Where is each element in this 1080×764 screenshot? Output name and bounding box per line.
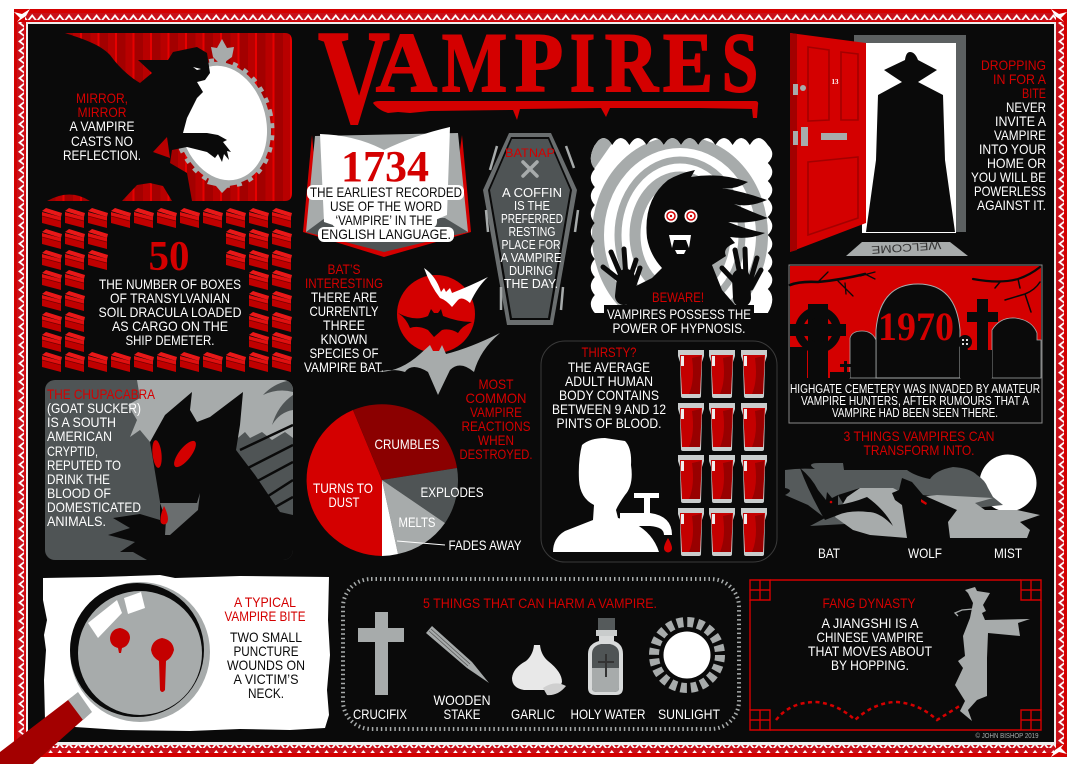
- bats text: KNOWN: [320, 331, 368, 347]
- pie chart: [307, 404, 458, 556]
- book text: ‘VAMPIRE’ IN THE: [336, 212, 432, 228]
- door heading: DROPPING: [981, 57, 1046, 73]
- label backing: [307, 185, 464, 242]
- thirsty text: BETWEEN 9 AND 12: [552, 401, 666, 417]
- pie labels: TURNS TO: [313, 480, 373, 496]
- icon: hypnotic figure: [625, 170, 768, 320]
- icon: magnifying glass: [70, 582, 210, 722]
- pie leader line: [397, 541, 445, 545]
- icon: graveyard ground: [790, 345, 992, 378]
- panel: vampire bite: [0, 575, 330, 764]
- bats text: VAMPIRE BAT.: [304, 359, 384, 375]
- icon: wolf eye: [921, 499, 927, 505]
- number 50: 50: [148, 234, 190, 280]
- cape highlight: [153, 137, 170, 158]
- harms labels: SUNLIGHT: [658, 706, 720, 722]
- boxes text: OF TRANSYLVANIAN: [110, 290, 230, 306]
- door edge: [790, 33, 797, 252]
- bats text: CURRENTLY: [310, 303, 379, 319]
- door text: NEVER: [1006, 99, 1046, 115]
- panel: highgate 1970: [789, 265, 1042, 423]
- hypnosis text: POWER OF HYPNOSIS.: [612, 320, 746, 336]
- boxes text: SHIP DEMETER.: [126, 332, 214, 348]
- transform labels: BAT: [818, 545, 840, 561]
- hypnosis text: VAMPIRES POSSESS THE: [607, 306, 751, 322]
- year 1970: 1970: [878, 304, 954, 349]
- icon: magnifier collar: [68, 692, 92, 720]
- bats text: THREE: [323, 317, 365, 333]
- chupacabra heading: THE CHUPACABRA: [47, 386, 156, 402]
- thirsty heading: THIRSTY?: [582, 344, 637, 360]
- pie heading: REACTIONS: [462, 418, 530, 434]
- harms labels: HOLY WATER: [570, 706, 646, 722]
- icon: crossbones: [523, 162, 537, 176]
- bite heading: A TYPICAL: [234, 594, 296, 610]
- bats text: THERE ARE: [311, 289, 377, 305]
- panel: bats: [304, 261, 500, 395]
- hypnosis heading: BEWARE!: [652, 289, 704, 305]
- door text: POWERLESS: [974, 183, 1046, 199]
- page sides: [306, 133, 468, 250]
- icon: small ball stone: [958, 335, 972, 349]
- door text: INVITE A: [995, 113, 1047, 129]
- pie heading: WHEN: [478, 432, 514, 448]
- mirror text: A VAMPIRE: [70, 118, 134, 134]
- icon: vampire in doorway: [866, 52, 955, 232]
- boxes text: AS CARGO ON THE: [112, 318, 228, 334]
- bite text: PUNCTURE: [234, 643, 298, 659]
- icon: fangs: [669, 235, 691, 254]
- icon: small headstone: [850, 331, 876, 378]
- bat eye: [830, 501, 832, 503]
- door text: VAMPIRE: [994, 127, 1046, 143]
- bite text: TWO SMALL: [230, 629, 302, 645]
- door heading: BITE: [1022, 85, 1046, 101]
- icon: jiangshi: [955, 587, 1030, 721]
- bats heading: BAT’S: [328, 261, 360, 277]
- bite text: A VICTIM’S: [234, 671, 298, 687]
- icon: vampire silhouette: [28, 33, 231, 201]
- transform labels: WOLF: [908, 545, 942, 561]
- chupacabra text: (GOAT SUCKER): [47, 400, 141, 416]
- coffin text: A COFFIN: [502, 186, 562, 200]
- pie labels: FADES AWAY: [448, 537, 522, 553]
- fang text: A JIANGSHI IS A: [822, 615, 919, 631]
- coffin heading: BATNAP: [505, 146, 555, 160]
- door text: HOME OR: [987, 155, 1046, 171]
- scene: [45, 380, 293, 560]
- transform heading: TRANSFORM INTO.: [864, 442, 974, 458]
- door text: INTO YOUR: [979, 141, 1046, 157]
- mirror heading: MIRROR: [78, 104, 126, 120]
- chupacabra text: CRYPTID,: [47, 443, 98, 459]
- thirsty text: ADULT HUMAN: [565, 373, 653, 389]
- coffin text: A VAMPIRE: [500, 251, 562, 265]
- icon: white bat: [424, 268, 488, 307]
- icon: red moon: [397, 275, 475, 353]
- pie labels: DUST: [328, 494, 360, 510]
- icon: grey bat: [378, 333, 500, 395]
- title: [318, 3, 758, 151]
- book text: THE EARLIEST RECORDED: [310, 184, 462, 200]
- bite text: NECK.: [248, 685, 284, 701]
- mirror heading: MIRROR,: [76, 90, 128, 106]
- pie labels: CRUMBLES: [374, 436, 440, 452]
- icon: man: [553, 438, 659, 552]
- harms heading: 5 THINGS THAT CAN HARM A VAMPIRE.: [423, 595, 657, 611]
- icon: right headstone: [992, 318, 1041, 378]
- panel: pie chart: [307, 376, 532, 556]
- fang text: CHINESE VAMPIRE: [816, 629, 924, 645]
- book text: ENGLISH LANGUAGE.: [321, 226, 451, 242]
- highgate text: VAMPIRE HAD BEEN SEEN THERE.: [832, 406, 998, 420]
- rope outline: [343, 579, 739, 729]
- coffin text: DURING: [509, 264, 553, 278]
- harms labels: GARLIC: [511, 706, 555, 722]
- door text: YOU WILL BE: [971, 169, 1046, 185]
- chupacabra text: REPUTED TO: [47, 457, 121, 473]
- panel: coffin: [483, 133, 578, 325]
- boxes text: THE NUMBER OF BOXES: [99, 276, 241, 292]
- pie labels: MELTS: [398, 514, 436, 530]
- chupacabra text: ANIMALS.: [47, 513, 106, 529]
- door panels: [808, 47, 858, 235]
- panel: fang dynasty: [750, 580, 1041, 740]
- title: S: [722, 16, 758, 110]
- title: P: [515, 16, 563, 110]
- mirror text: CASTS NO: [71, 133, 133, 149]
- icon: magnifier handle: [0, 697, 86, 764]
- chupacabra text: DRINK THE: [47, 471, 110, 487]
- harms labels: CRUCIFIX: [353, 706, 408, 722]
- icon: dark cloud: [785, 463, 1003, 526]
- torn paper: [43, 575, 330, 731]
- icon: blood drop: [664, 538, 672, 552]
- vampire eye: [193, 67, 201, 70]
- pie heading: COMMON: [466, 390, 526, 406]
- panel: chupacabra: [45, 380, 293, 560]
- year 1734: 1734: [341, 142, 429, 191]
- icon: bite wound right: [151, 638, 174, 692]
- panel outline: [541, 341, 777, 562]
- panel: hypnosis: [590, 125, 775, 336]
- icon: bat silhouette: [800, 468, 893, 526]
- door heading: IN FOR A: [993, 71, 1047, 87]
- icon: headstone cross: [967, 299, 998, 359]
- door frame: [854, 35, 966, 232]
- panel: transformations: [785, 428, 1040, 561]
- transform heading: 3 THINGS VAMPIRES CAN: [844, 428, 994, 444]
- icon: stake: [426, 626, 489, 683]
- transform labels: MIST: [994, 545, 1022, 561]
- title: I: [570, 16, 595, 110]
- book cover: [303, 135, 471, 257]
- bite heading: VAMPIRE BITE: [224, 608, 306, 624]
- harms labels: STAKE: [444, 706, 480, 722]
- dark pages: [306, 218, 468, 252]
- frame: [750, 580, 1041, 730]
- title: M: [442, 16, 507, 110]
- chupacabra text: DOMESTICATED: [47, 499, 141, 515]
- coffin handles: [486, 146, 578, 310]
- pie labels: EXPLODES: [420, 484, 484, 500]
- swirl background: [590, 138, 772, 313]
- fang text: THAT MOVES ABOUT: [808, 643, 932, 659]
- panel: pints of blood: [541, 341, 777, 562]
- door text: AGAINST IT.: [977, 197, 1046, 213]
- highgate text: VAMPIRE HUNTERS, AFTER RUMOURS THAT A: [801, 394, 1030, 408]
- coffin text: IS THE: [514, 199, 550, 213]
- icon: bite wound left: [110, 628, 130, 653]
- icon: wolf silhouette: [892, 478, 957, 538]
- panel: door: [790, 33, 1047, 256]
- icon: left claw: [603, 249, 640, 296]
- thirsty text: PINTS OF BLOOD.: [556, 415, 662, 431]
- panel: five harms: [343, 579, 739, 729]
- book text: USE OF THE WORD: [330, 198, 442, 214]
- icon: welcome mat: WELCOME: [871, 239, 942, 255]
- icon: figure base: [604, 305, 754, 321]
- chupacabra text: IS A SOUTH: [47, 414, 116, 430]
- copyright: © JOHN BISHOP 2019: [976, 732, 1039, 740]
- icon: spiral eyes: [664, 210, 698, 222]
- icon: blood drip rule: [373, 101, 758, 120]
- coffin text: THE DAY.: [504, 277, 558, 291]
- pie heading: VAMPIRE: [470, 404, 522, 420]
- icon: right claw: [722, 249, 761, 298]
- icon: branches: [790, 267, 1040, 312]
- icon: light mist: [835, 488, 1040, 538]
- bats text: SPECIES OF: [310, 345, 378, 361]
- icon: mini cross: [840, 361, 851, 375]
- icon: crucifix: [358, 612, 404, 695]
- title: V: [318, 3, 390, 151]
- chupacabra text: AMERICAN: [47, 428, 112, 444]
- thirsty text: BODY CONTAINS: [559, 387, 659, 403]
- white pages: [320, 127, 450, 242]
- icon: pint glasses: [678, 350, 767, 556]
- bite text: WOUNDS ON: [227, 657, 305, 673]
- icon: hop trail: [776, 702, 961, 720]
- title: R: [605, 16, 659, 110]
- panel: mirror: [28, 33, 292, 201]
- icon: garlic: [512, 645, 566, 695]
- door hardware: [793, 84, 847, 146]
- panel outline: [789, 265, 1042, 423]
- harms labels: WOODEN: [434, 692, 490, 708]
- icon: celtic cross: [790, 304, 846, 378]
- chupacabra text: BLOOD OF: [47, 485, 111, 501]
- icon: ornate mirror: [161, 39, 285, 196]
- coffin text: PREFERRED: [501, 212, 563, 226]
- icon: holy water: [588, 618, 623, 695]
- title: E: [663, 16, 713, 110]
- coffin body: [483, 133, 577, 325]
- panel: open book 1734: [303, 127, 471, 257]
- bats heading: INTERESTING: [305, 275, 383, 291]
- icon: tap: [620, 493, 672, 535]
- mirror text: REFLECTION.: [63, 147, 141, 163]
- icon: sunlight: [654, 622, 720, 688]
- fang text: BY HOPPING.: [831, 657, 909, 673]
- icon: box grid: [42, 208, 292, 372]
- pie heading: MOST: [478, 376, 514, 392]
- icon: welcome mat: [846, 239, 968, 256]
- fang heading: FANG DYNASTY: [822, 595, 916, 611]
- coffin text: RESTING: [508, 225, 556, 239]
- title: A: [376, 16, 437, 110]
- panel: soil boxes: [42, 208, 292, 372]
- coffin text: PLACE FOR: [502, 238, 560, 252]
- icon: black bat: [398, 309, 472, 337]
- red door: [790, 33, 866, 252]
- white interior: [862, 43, 956, 233]
- icon: big headstone: [876, 284, 960, 378]
- thirsty text: THE AVERAGE: [568, 359, 650, 375]
- icon: moon: [980, 454, 1036, 512]
- icon: ribbon: [955, 609, 973, 616]
- boxes text: SOIL DRACULA LOADED: [98, 304, 242, 320]
- red sky: [790, 266, 1041, 378]
- door number: 13: [832, 78, 839, 86]
- pie heading: DESTROYED.: [460, 446, 532, 462]
